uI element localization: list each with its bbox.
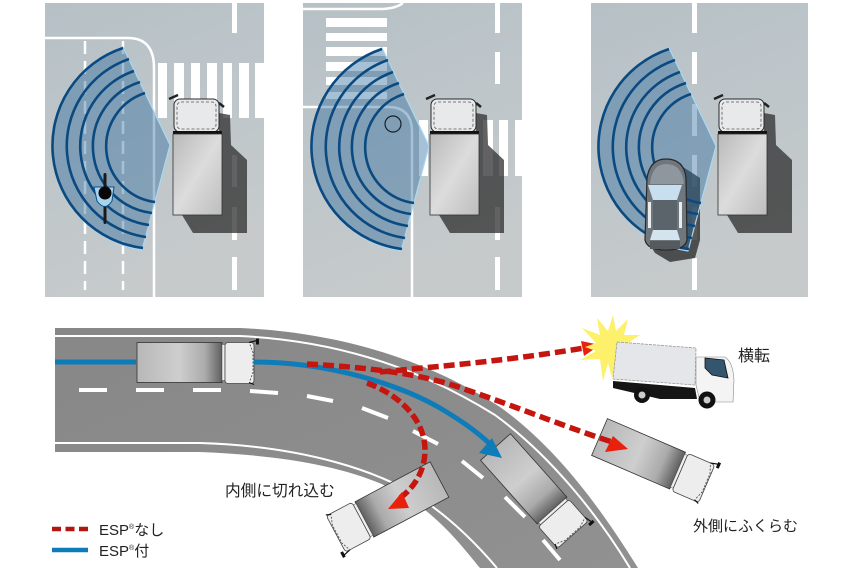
truck: with ESP (479, 431, 595, 553)
blue path with ESP (55, 362, 502, 458)
label: swing outside: 外側にふくらむ (693, 518, 798, 535)
red dashed path: inner cut (367, 383, 425, 509)
red dashed path: rollover (380, 341, 600, 372)
truck: cutting inside (321, 460, 451, 558)
label: rollover: 横転 (738, 347, 770, 365)
truck: overturned side view (613, 342, 734, 408)
truck (426, 95, 504, 233)
legend: with ESP: ESP (99, 543, 129, 560)
legend: without ESP (52, 522, 164, 539)
icon: impact star (580, 315, 644, 381)
red dashed path: outer swing (307, 364, 628, 452)
panel: road curve diagram (55, 328, 721, 568)
legend: with ESP: ® (129, 544, 135, 552)
road (55, 328, 638, 568)
truck (714, 95, 792, 233)
legend: with ESP (52, 543, 149, 560)
panel: cyclist detection (45, 3, 264, 297)
legend: without ESP: ® (129, 523, 135, 531)
label: cut inside: 内側に切れ込む (225, 482, 335, 500)
sensor fan (598, 48, 716, 251)
sensor fan (52, 47, 170, 250)
truck (169, 95, 247, 233)
sensor fan (311, 48, 429, 251)
legend: with ESP: 付 (134, 543, 149, 560)
legend: without ESP: ESP (99, 522, 129, 539)
icon: cyclist (94, 173, 114, 224)
legend: without ESP: なし (134, 522, 164, 539)
pedestrian marker (385, 116, 401, 132)
panel: car detection (591, 3, 808, 297)
truck: swinging outside (591, 415, 721, 505)
legend (52, 522, 164, 560)
panel: pedestrian detection (303, 3, 522, 297)
truck: before curve (137, 338, 259, 384)
icon: car (645, 159, 687, 250)
